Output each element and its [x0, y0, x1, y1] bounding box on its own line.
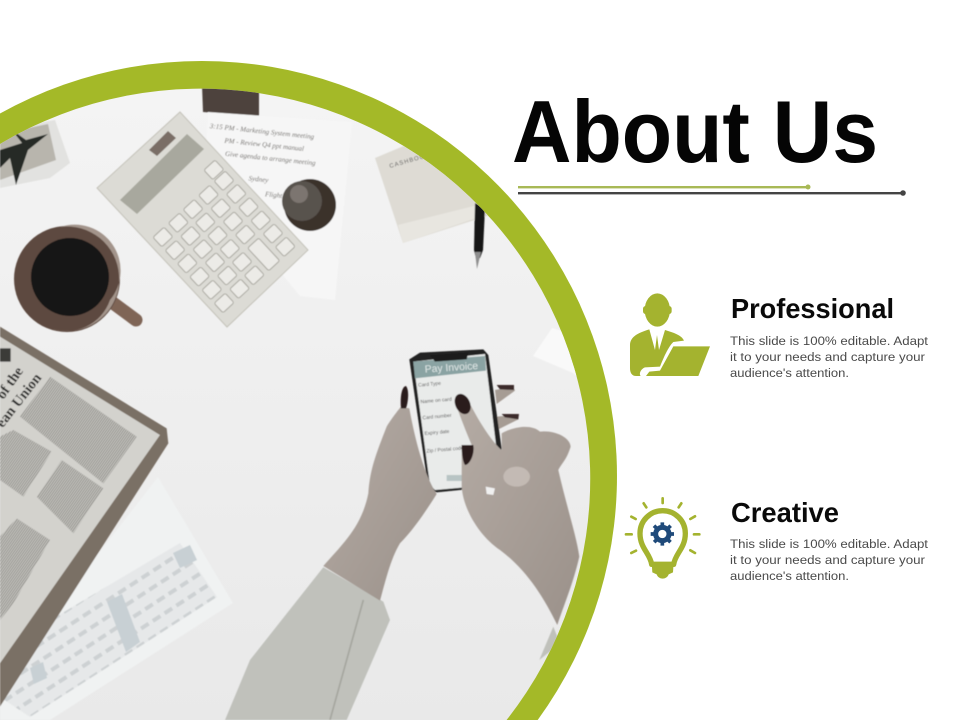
- photo: financial sheet: [0, 477, 233, 720]
- photo: pen: [474, 203, 485, 269]
- photo: cashbook notebook: [375, 146, 488, 243]
- photo: cashbook notebook: CASHBOOK: [389, 153, 431, 170]
- photo: handwritten note: Flight: [264, 190, 284, 200]
- photo: handwritten note: 3:15 PM - Marketing System meeting: [208, 122, 315, 141]
- icon: lightbulb with gear: [626, 498, 699, 579]
- text: creative description: [730, 537, 929, 583]
- photo: handwritten note: [207, 111, 337, 232]
- right hand: [455, 396, 579, 625]
- back fingers: [495, 387, 515, 404]
- photo: coffee mug: [14, 225, 136, 332]
- photo: paperweight ball: [282, 179, 336, 231]
- phone: Expiry date: [424, 429, 450, 437]
- text: professional description: [730, 334, 929, 380]
- title: About Us: [512, 82, 878, 181]
- text: professional description: audience's attention.: [730, 366, 849, 380]
- phone: Name on card: [420, 397, 452, 405]
- photo: handwritten note: PM - Review Q4 ppt manual: [223, 137, 304, 153]
- phone: [409, 349, 502, 492]
- text: professional description: This slide is 100% editable. Adapt: [730, 334, 929, 348]
- text: creative description: This slide is 100% editable. Adapt: [730, 537, 929, 551]
- green circle ring: [0, 61, 617, 720]
- photo: handwritten note: Give agenda to arrange meeting: [225, 150, 316, 167]
- text: creative description: audience's attention.: [730, 569, 849, 583]
- sleeve: [225, 567, 390, 720]
- photo: paper corner: [533, 328, 592, 388]
- phone: Zip / Postal code: [426, 445, 464, 455]
- photo: wooden block: [202, 85, 259, 116]
- photo: hands, sleeve and phone: [225, 349, 579, 720]
- heading: professional: Professional: [731, 293, 894, 324]
- phone: Pay Invoice: [424, 361, 479, 376]
- photo: calculator: [97, 112, 308, 327]
- text: professional description: it to your needs and capture your: [730, 350, 925, 364]
- calculator keys: [143, 160, 295, 313]
- gear: [651, 522, 674, 546]
- text: creative description: it to your needs and capture your: [730, 553, 925, 567]
- title underline: dark: [518, 190, 906, 196]
- phone: Card number: [422, 413, 452, 421]
- title underline: green: [518, 184, 810, 190]
- left hand: [323, 407, 437, 601]
- circular desk photo: [0, 85, 595, 720]
- phone: Card Type: [418, 381, 442, 389]
- icon: professional at laptop: [630, 293, 710, 376]
- photo: handwritten note: Sydney: [248, 174, 270, 184]
- photo: newspaper: [0, 327, 168, 707]
- photo: plant pot: [0, 120, 70, 188]
- heading: creative: Creative: [731, 497, 839, 528]
